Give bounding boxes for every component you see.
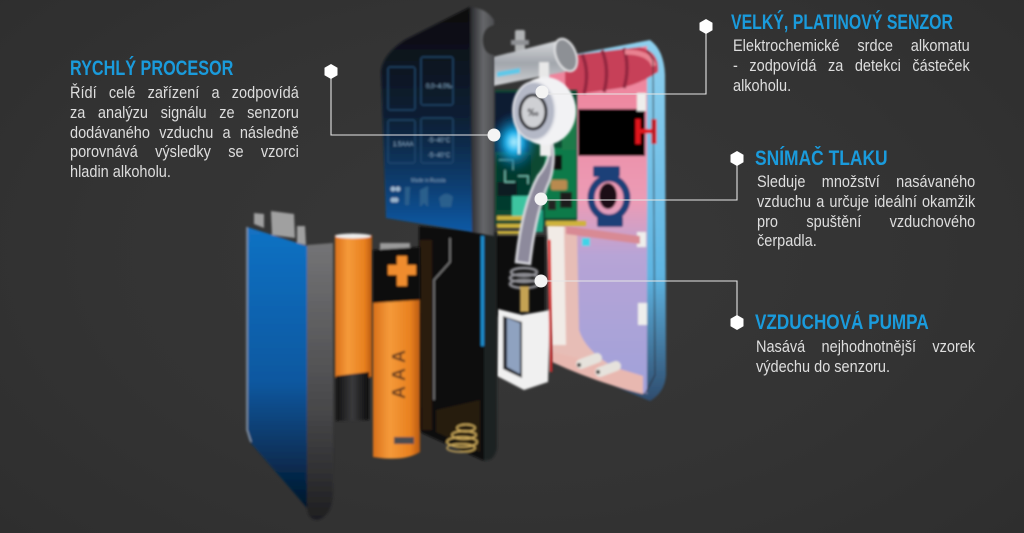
sensor and air hose: ‰ (528, 107, 538, 119)
text: fast processor (70, 83, 299, 181)
black display (578, 109, 645, 156)
text: pressure sensor: pro spuštění vzduchového (757, 213, 975, 231)
callout dots (488, 86, 548, 288)
text: fast processor: hladin alkoholu. (70, 163, 171, 181)
rear orange battery (335, 234, 372, 421)
air pump (497, 240, 551, 390)
inner lower floor (552, 326, 643, 394)
AAA battery (373, 243, 420, 459)
text: platinum sensor: alkoholu. (733, 77, 791, 95)
black chassis (495, 236, 545, 316)
text: pressure sensor: vzduchu a určuje ideální okamžik (757, 193, 975, 211)
rear black housing (418, 226, 497, 460)
text: fast processor: Řídí celé zařízení a zodpovídá (70, 84, 299, 102)
battery label: AAA (389, 345, 409, 399)
white pillars (581, 358, 616, 372)
status light (582, 238, 590, 246)
circuit board (488, 90, 586, 316)
white clips (637, 93, 647, 325)
spring contact (447, 424, 477, 452)
red digit: H (633, 111, 659, 152)
gold pins (497, 216, 586, 234)
red air tube (565, 47, 658, 96)
front cover: 0,0~4,0‰ (426, 84, 452, 90)
text: air pump: Nasává nejhodnotnější vzorek (756, 338, 975, 356)
text: fast processor: za analýzu signálu ze senzoru (70, 104, 299, 122)
text: pressure sensor: Sleduje množství nasávaného (757, 173, 975, 191)
callout leader lines (331, 27, 737, 322)
front cover: Made in Russia (411, 178, 446, 184)
text: pressure sensor: čerpadla. (757, 232, 817, 250)
text: fast processor: porovnává výsledky se vzorci (70, 143, 299, 161)
text: platinum sensor: Elektrochemické srdce alkomatu (733, 37, 970, 55)
text: platinum sensor: - zodpovídá za detekci částeček (733, 57, 970, 75)
heading: platinum sensor: VELKÝ, PLATINOVÝ SENZOR (731, 11, 953, 34)
text: fast processor: dodávaného vzduchu a následně (70, 124, 299, 142)
button rocker (591, 166, 627, 227)
front cover: 1.5AAA (393, 142, 413, 148)
glass intake tube (493, 30, 582, 86)
text: pressure sensor (757, 173, 976, 250)
sensor and air hose (513, 62, 576, 264)
text: air pump: výdechu do senzoru. (756, 358, 890, 376)
screen markings (388, 57, 453, 163)
front cover: -5~40°C (428, 153, 451, 159)
front cover: -5~40°C (428, 138, 451, 144)
text: platinum sensor (733, 37, 970, 95)
right housing shell (545, 40, 666, 401)
platinum sensor (514, 77, 576, 145)
front cover (381, 7, 494, 236)
heading: air pump: VZDUCHOVÁ PUMPA (755, 311, 929, 334)
heading: fast processor: RYCHLÝ PROCESOR (70, 57, 233, 80)
blue battery cover (247, 211, 333, 520)
text: air pump (756, 338, 976, 376)
heading: pressure sensor: SNÍMAČ TLAKU (755, 147, 888, 170)
hexagon markers (324, 19, 744, 330)
